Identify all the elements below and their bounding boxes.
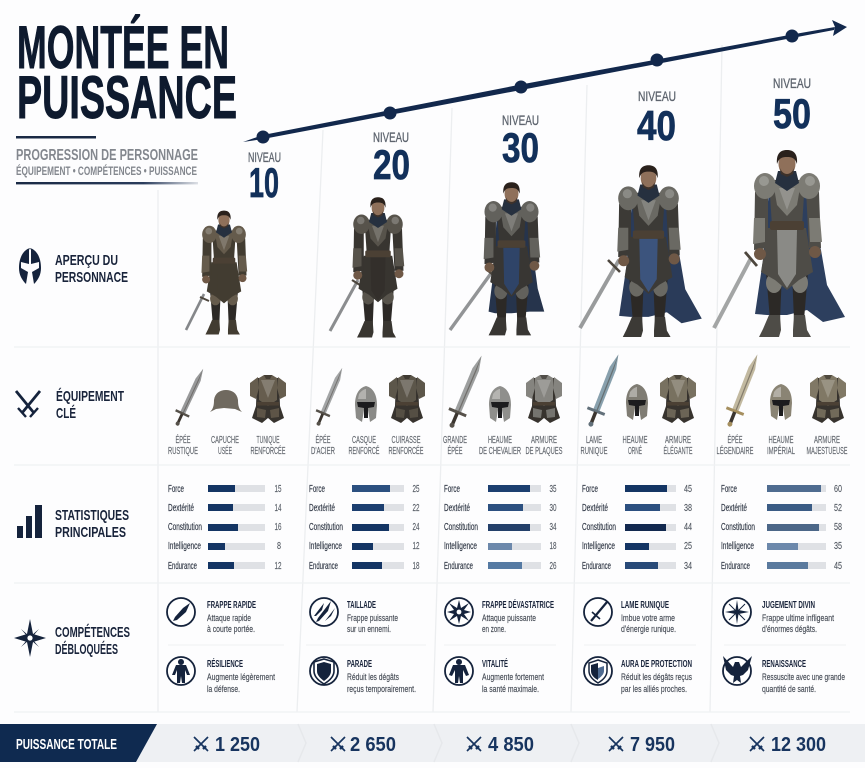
total power level 30	[467, 734, 534, 756]
row header: unlocked skills: COMPÉTENCES	[55, 624, 130, 641]
icon: knight helm	[489, 386, 511, 422]
label: équipement niveau 50: IMPÉRIAL	[767, 444, 795, 457]
row header: main statistics: PRINCIPALES	[55, 524, 126, 541]
skill: renaissance: RENAISSANCE	[762, 659, 806, 670]
stats level 10: Constitution	[168, 522, 202, 533]
label: équipement niveau 20: D'ACIER	[311, 446, 335, 457]
level 40 label: 40	[637, 102, 676, 149]
label: équipement niveau 50: HEAUME	[768, 435, 794, 446]
skill: résilience: Augmente légèrement	[207, 672, 275, 683]
total power level 30: 4 850	[488, 734, 534, 756]
stats level 10: Dextérité	[168, 503, 194, 514]
stats level 20	[309, 483, 420, 572]
label: équipement niveau 50: ARMURE	[814, 435, 840, 446]
label: équipement niveau 40: LAME	[586, 435, 602, 446]
skill: lame runique: d'énergie runique.	[621, 624, 676, 635]
stats level 50: 52	[834, 502, 842, 514]
level 50 label: NIVEAU	[773, 75, 811, 91]
label: équipement niveau 30: ARMURE	[531, 435, 557, 446]
stats level 40: 25	[684, 540, 692, 552]
label: équipement niveau 40: ARMURE	[665, 435, 691, 446]
equipment level 50	[716, 351, 848, 457]
icon: great sword	[442, 352, 490, 431]
skill: vitalité	[482, 657, 544, 695]
stats level 10: 8	[277, 540, 281, 552]
stats level 40: 38	[684, 502, 692, 514]
skills level 20	[306, 598, 426, 695]
label: équipement niveau 20: RENFORCÉ	[348, 444, 380, 457]
skill: aura de protection	[621, 659, 692, 695]
skill: aura de protection: par les alliés proches.	[621, 684, 687, 695]
label: équipement niveau 10: RUSTIQUE	[168, 446, 198, 457]
level 10 label	[248, 149, 281, 206]
skill: parade: PARADE	[347, 659, 372, 670]
label: équipement niveau 20	[311, 433, 424, 457]
character level 10	[186, 211, 262, 334]
label: équipement niveau 50: ÉPÉE	[728, 433, 743, 446]
level 30 label: 30	[502, 124, 539, 171]
row header: key equipment: CLÉ	[56, 405, 76, 422]
equipment level 30	[442, 352, 563, 457]
skill: taillade: Frappe puissante	[347, 613, 398, 624]
icon: aura de protection	[584, 657, 612, 685]
stats level 30: Constitution	[444, 522, 478, 533]
stats level 10: Endurance	[168, 561, 197, 572]
total power level 10	[194, 734, 260, 756]
level 30 label: NIVEAU	[502, 112, 539, 128]
character level 50	[714, 150, 845, 337]
skill: parade	[347, 659, 416, 695]
stats level 40: Dextérité	[582, 503, 608, 514]
subtitle: PROGRESSION DE PERSONNAGE	[16, 147, 198, 164]
row header: main statistics	[17, 505, 129, 541]
stats level 40: 45	[684, 483, 692, 495]
row header: unlocked skills: DÉBLOQUÉES	[55, 641, 118, 658]
stats level 10: 16	[274, 521, 282, 533]
label: équipement niveau 50	[716, 433, 848, 457]
icon: ornate helm	[626, 384, 648, 420]
icon: steel sword	[311, 365, 349, 428]
stats level 50: 45	[834, 560, 842, 572]
icon: résilience	[167, 657, 195, 685]
stats level 40	[582, 483, 692, 572]
label: équipement niveau 10: RENFORCÉE	[250, 444, 286, 457]
skill: frappe rapide	[207, 600, 256, 635]
skill: résilience: la défense.	[207, 684, 240, 695]
icon: reinforced cuirass	[389, 375, 425, 423]
stats level 20: Intelligence	[309, 541, 342, 552]
stats level 10: 14	[274, 502, 282, 514]
stats level 10: 12	[274, 560, 282, 572]
skill: renaissance: quantité de santé.	[762, 684, 816, 695]
stats level 30: 35	[550, 483, 557, 495]
level 40 label	[637, 88, 676, 149]
equipment level 40	[580, 351, 696, 457]
skill: résilience	[207, 657, 275, 695]
title: MONTÉE EN	[17, 14, 229, 81]
label: équipement niveau 40	[580, 435, 693, 457]
skill: taillade: sur un ennemi.	[347, 624, 391, 635]
label: équipement niveau 40: HEAUME	[622, 435, 648, 446]
level 40 label: NIVEAU	[638, 88, 676, 104]
level 50 label: 50	[773, 90, 811, 137]
stats level 10: Force	[168, 484, 184, 495]
stats level 50: 58	[834, 521, 842, 533]
label: équipement niveau 10: CAPUCHE	[211, 435, 239, 446]
label: équipement niveau 50: LÉGENDAIRE	[716, 444, 754, 457]
total power level 20: 2 650	[350, 734, 396, 756]
icon: reinforced helmet	[355, 386, 377, 422]
icon: parade	[310, 657, 338, 685]
stats level 30: 34	[550, 521, 557, 533]
level 10 label: 10	[249, 159, 279, 206]
stats level 40: Endurance	[582, 561, 611, 572]
icon: jugement divin	[723, 598, 751, 626]
skill: vitalité: la santé maximale.	[482, 684, 539, 695]
skill: frappe dévastatrice: FRAPPE DÉVASTATRICE	[482, 598, 554, 611]
character level 20	[330, 197, 422, 338]
level 20 label: 20	[373, 141, 410, 188]
skill: jugement divin: JUGEMENT DIVIN	[762, 600, 815, 611]
stats level 50: 60	[834, 483, 842, 495]
stats level 20: Constitution	[309, 522, 343, 533]
label: équipement niveau 40: RUNIQUE	[580, 446, 608, 457]
skill: frappe dévastatrice: Attaque puissante	[482, 613, 536, 624]
stats level 40: 44	[684, 521, 692, 533]
icon: runic blade	[581, 351, 627, 430]
icon: lame runique	[584, 598, 612, 626]
icon: reinforced tunic	[250, 375, 286, 423]
skill: lame runique: Imbue votre arme	[621, 613, 675, 624]
skill: frappe dévastatrice	[482, 598, 554, 635]
total power label	[0, 724, 157, 762]
character level 30	[450, 182, 559, 335]
skill: lame runique	[621, 600, 676, 635]
icon: elegant armor	[660, 375, 696, 423]
total power label: PUISSANCE TOTALE	[16, 736, 117, 753]
label: équipement niveau 10: USÉE	[218, 444, 232, 457]
progression arrow	[243, 20, 847, 144]
row header: main statistics: STATISTIQUES	[55, 507, 129, 524]
icon: imperial helm	[770, 384, 792, 420]
skill: aura de protection: AURA DE PROTECTION	[621, 659, 692, 670]
icon: vitalité	[445, 657, 473, 685]
label: équipement niveau 30: GRANDE	[443, 435, 467, 446]
stats level 10	[168, 483, 282, 572]
skills level 10	[167, 598, 284, 695]
stats level 40: Constitution	[582, 522, 616, 533]
stats level 20: 24	[412, 521, 420, 533]
label: équipement niveau 10: TUNIQUE	[256, 435, 280, 446]
total power level 40: 7 950	[630, 734, 675, 756]
label: équipement niveau 20: RENFORCÉE	[388, 444, 424, 457]
row header: character preview: APERÇU DU	[55, 252, 118, 269]
skills level 30	[444, 598, 556, 695]
skill: frappe rapide: Attaque rapide	[207, 613, 251, 624]
stats level 30: Force	[444, 484, 460, 495]
stats level 30: Intelligence	[444, 541, 477, 552]
icon: taillade	[310, 598, 338, 626]
skill: parade: Réduit les dégâts	[347, 672, 399, 683]
icon: rustic sword	[170, 366, 210, 429]
stats level 20: Dextérité	[309, 503, 335, 514]
stats level 50: Intelligence	[721, 541, 754, 552]
icon: renaissance	[723, 656, 752, 685]
icon: legendary sword	[720, 351, 766, 430]
row header: unlocked skills	[14, 619, 130, 658]
stats level 50: Force	[721, 484, 737, 495]
stats level 20: Force	[309, 484, 325, 495]
title: PUISSANCE	[17, 64, 237, 131]
stats level 20: 18	[412, 560, 420, 572]
row header: key equipment: ÉQUIPEMENT	[56, 388, 124, 405]
skill: frappe dévastatrice: en zone.	[482, 624, 506, 635]
label: équipement niveau 30: DE CHEVALIER	[479, 446, 521, 457]
skill: vitalité: VITALITÉ	[482, 657, 508, 670]
skill: vitalité: Augmente fortement	[482, 672, 544, 683]
total power level 10: 1 250	[215, 734, 260, 756]
row header: character preview: PERSONNACE	[55, 269, 128, 286]
stats level 30: Dextérité	[444, 503, 470, 514]
icon: plate armor	[526, 375, 562, 423]
label: équipement niveau 10	[168, 433, 286, 457]
row header: key equipment	[16, 388, 124, 422]
total power level 20	[331, 734, 396, 756]
label: équipement niveau 30: HEAUME	[488, 435, 512, 446]
total power level 50	[750, 734, 826, 756]
row header: character preview	[19, 248, 128, 286]
stats level 30: 18	[550, 540, 557, 552]
stats level 20: 25	[412, 483, 420, 495]
label: équipement niveau 40: ORNÉ	[628, 444, 642, 457]
level 30 label	[502, 112, 539, 171]
skills level 50	[723, 598, 846, 695]
skill: renaissance	[762, 659, 845, 695]
stats level 50: 35	[834, 540, 842, 552]
level 10 label: NIVEAU	[248, 149, 281, 165]
skill: jugement divin	[762, 600, 834, 635]
stats level 20: 12	[412, 540, 420, 552]
skill: taillade: TAILLADE	[347, 600, 376, 611]
stats level 30: 26	[550, 560, 557, 572]
label: équipement niveau 30: ÉPÉE	[448, 444, 463, 457]
total power level 40	[609, 734, 675, 756]
icon: majestic armor	[810, 375, 846, 423]
total power band	[0, 724, 865, 762]
stats level 40: 34	[684, 560, 692, 572]
label: équipement niveau 20: CUIRASSE	[392, 435, 421, 446]
level 50 label	[773, 75, 811, 137]
label: équipement niveau 20: CASQUE	[352, 435, 376, 446]
stats level 40: Intelligence	[582, 541, 615, 552]
skill: jugement divin: d'énormes dégâts.	[762, 624, 817, 635]
stats level 10: 15	[274, 483, 282, 495]
skill: frappe rapide: FRAPPE RAPIDE	[207, 600, 256, 611]
stats level 20: 22	[412, 502, 420, 514]
stats level 30: 30	[550, 502, 557, 514]
level 20 label: NIVEAU	[373, 129, 409, 145]
stats level 50: Dextérité	[721, 503, 747, 514]
skills level 40	[584, 598, 696, 695]
stats level 50: Constitution	[721, 522, 755, 533]
equipment level 10	[168, 366, 286, 457]
label: équipement niveau 20: ÉPÉE	[316, 433, 331, 446]
icon: frappe dévastatrice	[445, 598, 473, 626]
label: équipement niveau 30: DE PLAQUES	[526, 446, 563, 457]
skill: taillade	[347, 600, 398, 635]
stats level 30: Endurance	[444, 561, 473, 572]
skill: frappe rapide: à courte portée.	[207, 624, 255, 635]
stats level 50: Endurance	[721, 561, 750, 572]
label: équipement niveau 10: ÉPÉE	[176, 433, 191, 446]
label: équipement niveau 30	[443, 435, 563, 457]
level 20 label	[373, 129, 410, 188]
total power level 50: 12 300	[771, 734, 826, 756]
subtitle	[16, 136, 198, 184]
icon: worn hood	[210, 390, 242, 412]
stats level 20: Endurance	[309, 561, 338, 572]
skill: jugement divin: Frappe ultime infligeant	[762, 613, 834, 624]
character level 40	[580, 165, 702, 337]
skill: lame runique: LAME RUNIQUE	[621, 600, 669, 611]
skill: aura de protection: Réduit les dégâts reçus	[621, 672, 692, 683]
stats level 50	[721, 483, 842, 572]
stats level 30	[444, 483, 557, 572]
subtitle: ÉQUIPEMENT • COMPÉTENCES • PUISSANCE	[16, 165, 197, 178]
skill: résilience: RÉSILIENCE	[207, 657, 243, 670]
skill: parade: reçus temporairement.	[347, 684, 416, 695]
stats level 10: Intelligence	[168, 541, 201, 552]
stats level 40: Force	[582, 484, 598, 495]
icon: frappe rapide	[167, 598, 195, 626]
title	[17, 14, 237, 131]
label: équipement niveau 40: ÉLÉGANTE	[664, 444, 693, 457]
equipment level 20	[311, 365, 425, 457]
